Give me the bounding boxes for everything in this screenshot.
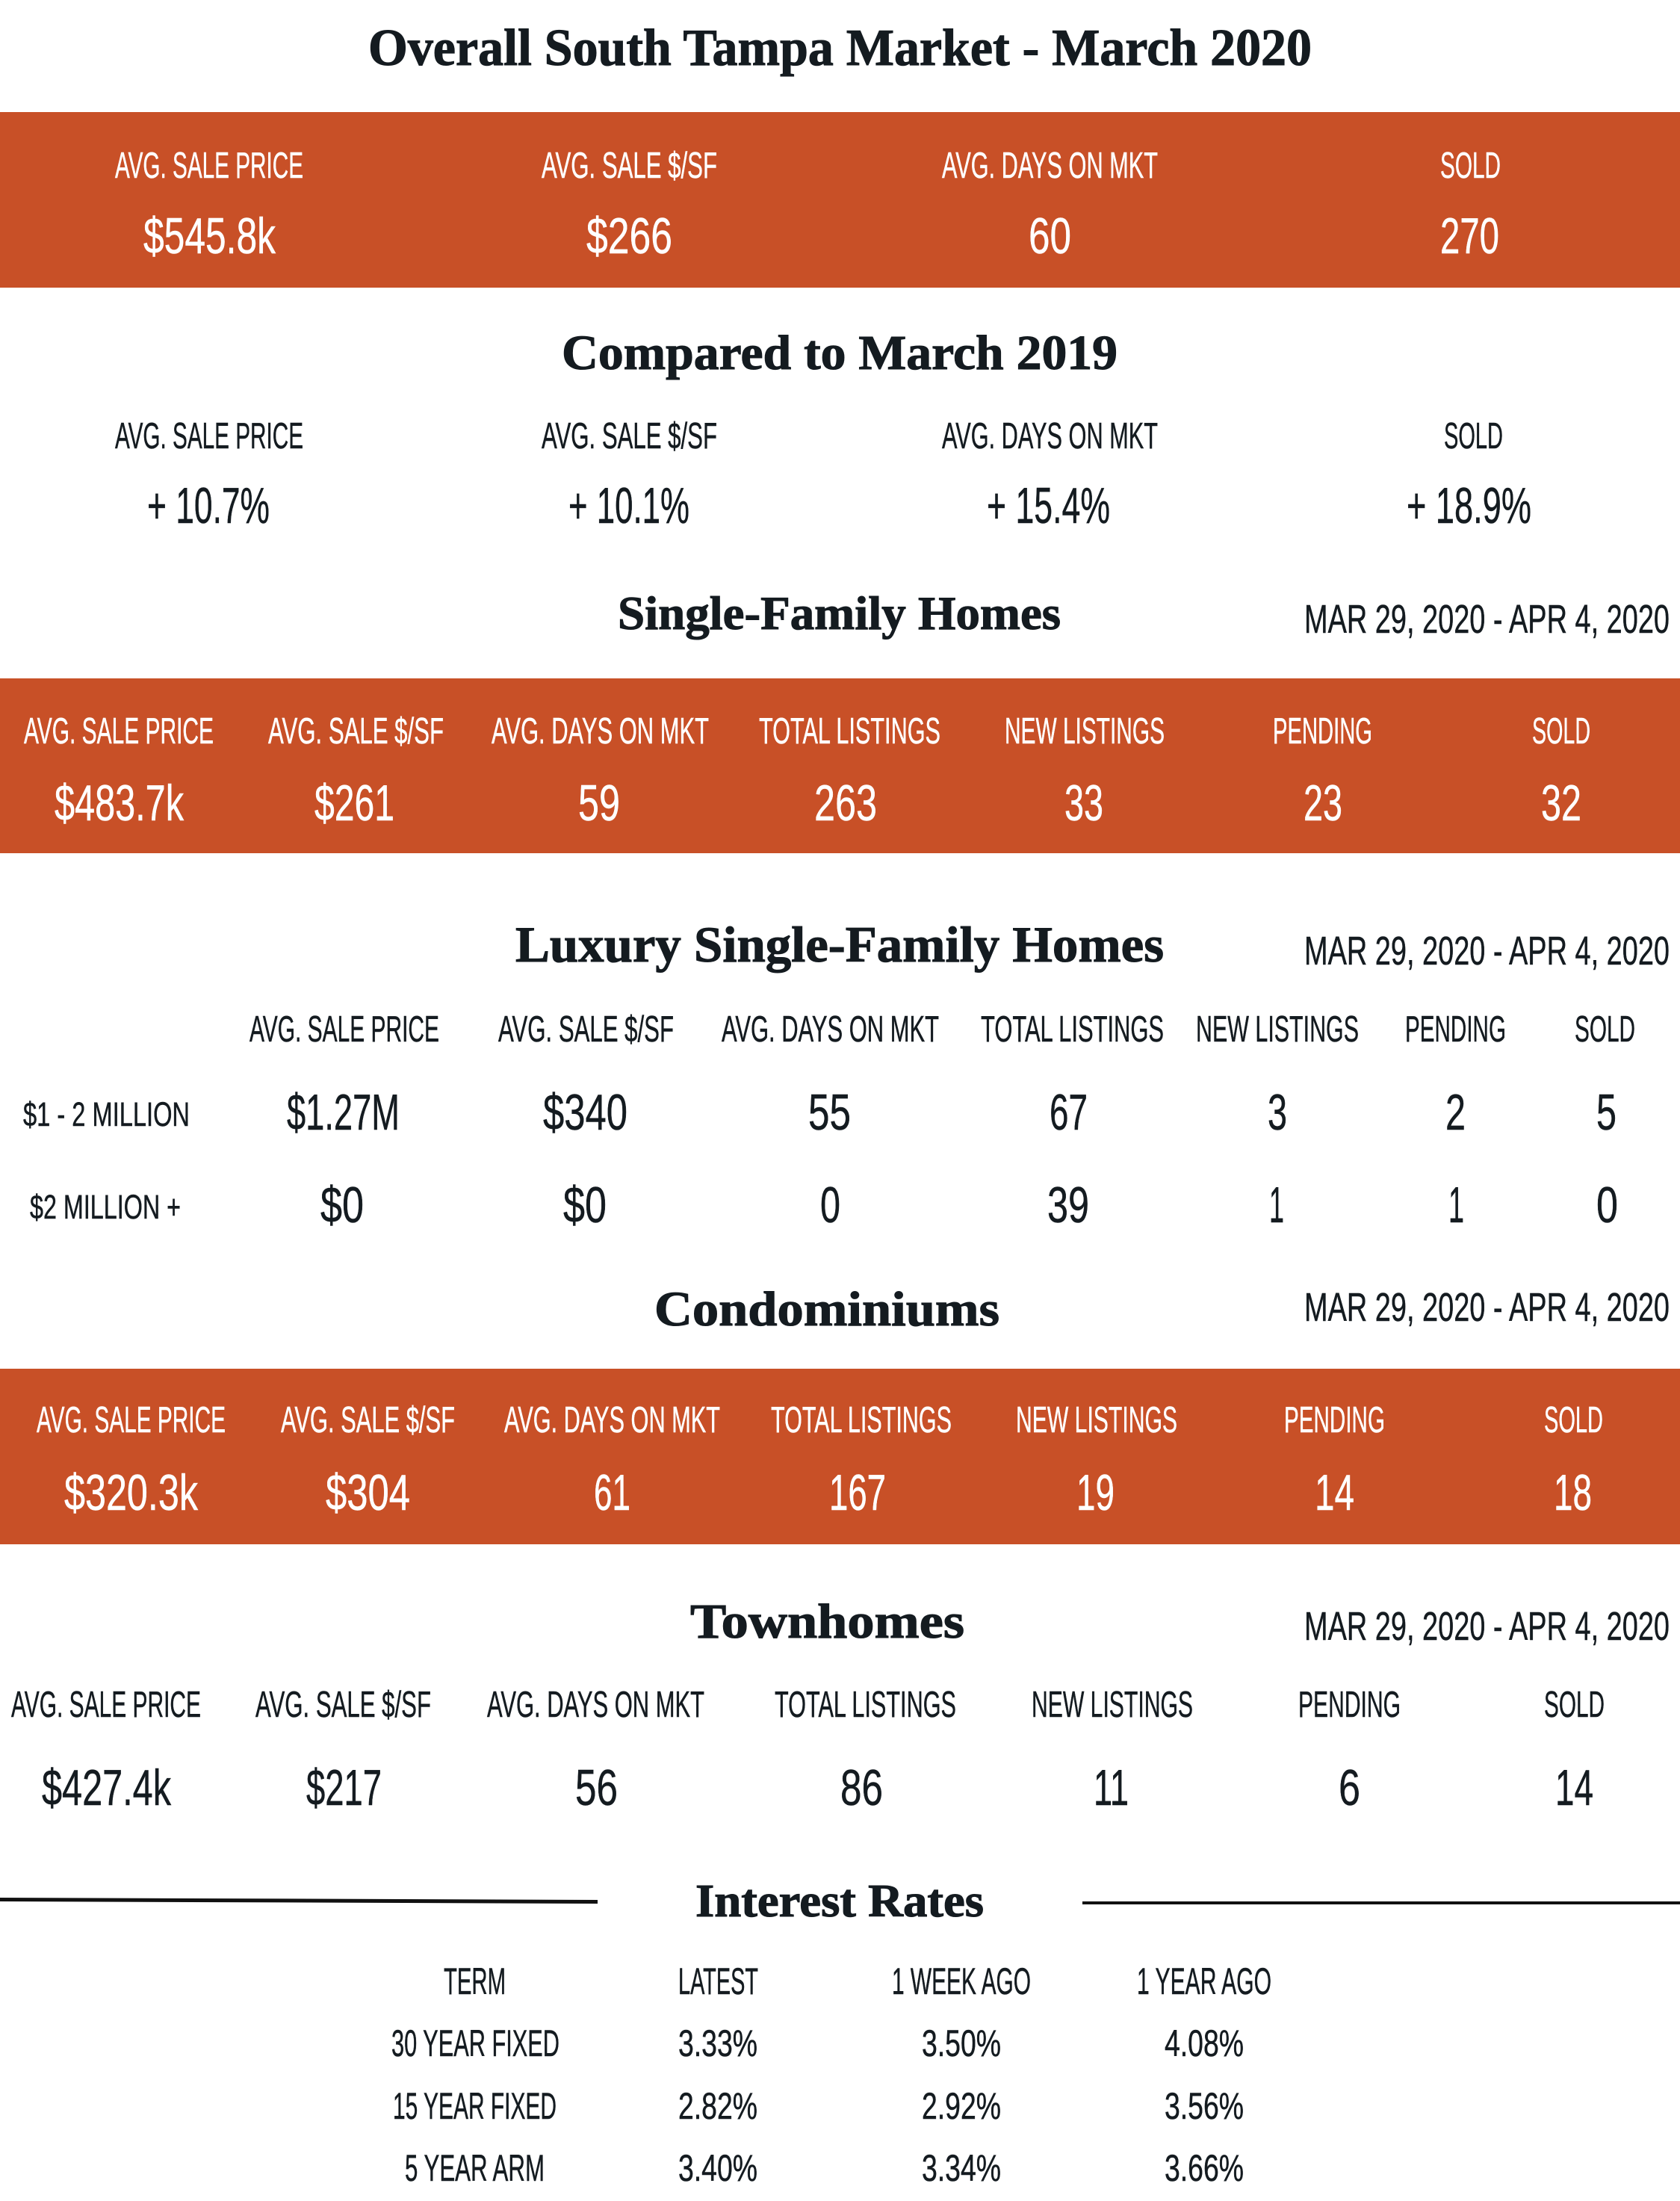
panel: townhomes metrics	[11, 1685, 1605, 1816]
panel: year over year comparison	[115, 416, 1531, 534]
metric: avg days on market	[942, 146, 1158, 264]
metric: pending	[1284, 1400, 1385, 1521]
row: $2 million +: 0	[1596, 1177, 1618, 1233]
metric: avg days on market: AVG. DAYS ON MKT	[487, 1685, 704, 1725]
metric: avg sale price: AVG. SALE PRICE	[37, 1400, 226, 1440]
row: $2 million +: $0	[320, 1177, 364, 1233]
metric: new listings	[1005, 711, 1165, 832]
metric: avg days on market change: + 15.4%	[987, 477, 1110, 534]
metric: sold change: + 18.9%	[1407, 477, 1531, 534]
row: 30 year fixed	[391, 2022, 1244, 2064]
metric: avg days on market: 56	[575, 1759, 618, 1816]
metric: avg sale price: AVG. SALE PRICE	[24, 711, 214, 752]
metric: pending: PENDING	[1298, 1685, 1401, 1725]
metric: new listings: NEW LISTINGS	[1016, 1400, 1177, 1440]
row: 5 year arm	[405, 2147, 1244, 2189]
metric: new listings: 19	[1076, 1464, 1115, 1521]
row: 5 year arm: 3.34%	[922, 2147, 1001, 2189]
metric: new listings	[1032, 1685, 1193, 1816]
row: 30 year fixed: 4.08%	[1165, 2022, 1244, 2064]
metric: avg sale $/sf: $217	[306, 1759, 382, 1816]
row: 30 year fixed: 3.50%	[922, 2022, 1001, 2064]
row: 5 year arm: 3.66%	[1165, 2147, 1244, 2189]
metric: avg days on market: 61	[594, 1464, 630, 1521]
heading: compared to march 2019: Compared to March 2019	[562, 326, 1118, 380]
metric: avg sale price: $320.3k	[64, 1464, 199, 1521]
metric: pending: 6	[1339, 1759, 1360, 1816]
row: $2 million +: 39	[1047, 1177, 1089, 1233]
metric: sold	[1440, 146, 1501, 264]
metric: pending: 23	[1304, 775, 1342, 832]
metric: new listings: NEW LISTINGS	[1032, 1685, 1193, 1725]
metric: total listings	[775, 1685, 956, 1816]
metric: avg days on market: AVG. DAYS ON MKT	[492, 711, 709, 752]
metric: avg days on market: 59	[578, 775, 620, 832]
metric: avg sale $/sf: AVG. SALE $/SF	[542, 146, 717, 186]
row: 5 year arm: 5 YEAR ARM	[405, 2147, 545, 2189]
metric: pending: PENDING	[1273, 711, 1372, 752]
row: 15 year fixed	[393, 2085, 1244, 2127]
row: $2 million +: $2 MILLION +	[30, 1188, 181, 1226]
metric: new listings: NEW LISTINGS	[1005, 711, 1165, 752]
heading: condominiums: Condominiums	[654, 1282, 999, 1337]
metric: total listings: TOTAL LISTINGS	[771, 1400, 952, 1440]
metric: total listings: 263	[814, 775, 877, 832]
metric: avg sale $/sf change: + 10.1%	[568, 477, 689, 534]
metric: avg days on market	[504, 1400, 720, 1521]
metric: sold: SOLD	[1544, 1685, 1605, 1725]
row: 30 year fixed: 3.33%	[678, 2022, 757, 2064]
metric: new listings: 33	[1064, 775, 1103, 832]
metric: sold: 270	[1440, 208, 1499, 264]
metric: avg sale $/sf: $261	[314, 775, 394, 832]
metric: avg sale price	[11, 1685, 201, 1816]
metric: avg days on market	[487, 1685, 704, 1816]
row: $2 million +: 1	[1448, 1177, 1464, 1233]
metric: total listings: TOTAL LISTINGS	[759, 711, 940, 752]
metric: sold: SOLD	[1532, 711, 1590, 752]
column headers: AVG. DAYS ON MKT	[722, 1009, 939, 1050]
row: $2 million +: 0	[820, 1177, 840, 1233]
metric: sold: SOLD	[1544, 1400, 1603, 1440]
metric: pending: 14	[1315, 1464, 1354, 1521]
metric: avg sale $/sf	[281, 1400, 455, 1521]
metric: sold	[1544, 1400, 1603, 1521]
row: $1 - 2 million: $1.27M	[287, 1084, 400, 1141]
panel: luxury table	[23, 1009, 1635, 1233]
panel: overall market band	[0, 112, 1680, 288]
metric: avg sale $/sf change	[542, 416, 717, 534]
metric: sold	[1532, 711, 1590, 832]
row: 15 year fixed: 2.92%	[922, 2085, 1001, 2127]
metric: avg sale $/sf: AVG. SALE $/SF	[268, 711, 444, 752]
metric: sold: 14	[1555, 1759, 1593, 1816]
metric: sold	[1544, 1685, 1605, 1816]
metric: avg sale price: AVG. SALE PRICE	[11, 1685, 201, 1725]
row: $1 - 2 million: 3	[1268, 1084, 1287, 1141]
table header: LATEST	[678, 1960, 758, 2002]
column headers: NEW LISTINGS	[1196, 1009, 1359, 1050]
metric: avg days on market change: AVG. DAYS ON MKT	[942, 416, 1158, 456]
row: $2 million +: $0	[563, 1177, 607, 1233]
column headers	[249, 1009, 1635, 1050]
heading: interest rates with rules: Interest Rates	[695, 1876, 984, 1927]
row: $1 - 2 million: $1 - 2 MILLION	[23, 1095, 190, 1133]
column headers: PENDING	[1405, 1009, 1506, 1050]
panel: interest rates table	[391, 1960, 1271, 2189]
column headers: AVG. SALE PRICE	[249, 1009, 439, 1050]
heading: townhomes: Townhomes	[690, 1594, 964, 1649]
metric: avg sale price change: AVG. SALE PRICE	[115, 416, 303, 456]
metric: sold: SOLD	[1440, 146, 1501, 186]
row: $2 million +: 1	[1269, 1177, 1284, 1233]
title: Overall South Tampa Market - March 2020	[368, 19, 1312, 77]
metric: avg sale price: $427.4k	[42, 1759, 172, 1816]
table header	[444, 1960, 1271, 2002]
metric: total listings: 167	[829, 1464, 886, 1521]
metric: avg sale $/sf: $304	[326, 1464, 410, 1521]
metric: avg sale price: $483.7k	[55, 775, 185, 832]
metric: total listings: TOTAL LISTINGS	[775, 1685, 956, 1725]
metric: pending	[1273, 711, 1372, 832]
row: 15 year fixed: 15 YEAR FIXED	[393, 2085, 557, 2127]
metric: sold change: SOLD	[1444, 416, 1503, 456]
row: $1 - 2 million: 55	[808, 1084, 851, 1141]
metric: avg sale $/sf	[268, 711, 444, 832]
metric: total listings	[759, 711, 940, 832]
metric: avg sale price	[115, 146, 303, 264]
metric: sold change	[1407, 416, 1531, 534]
table header: TERM	[444, 1960, 506, 2002]
heading: interest rates with rules	[0, 1876, 1680, 1927]
metric: sold: 18	[1554, 1464, 1592, 1521]
row: $2 million +	[30, 1177, 1618, 1233]
heading: luxury single-family homes: Luxury Single-Family Homes	[515, 916, 1164, 973]
metric: avg days on market change	[942, 416, 1158, 534]
metric: total listings	[771, 1400, 952, 1521]
metric: avg sale price change	[115, 416, 303, 534]
metric: avg sale $/sf	[542, 146, 717, 264]
metric: sold: 32	[1541, 775, 1581, 832]
metric: avg sale price	[37, 1400, 226, 1521]
metric: total listings: 86	[840, 1759, 883, 1816]
row: 5 year arm: 3.40%	[678, 2147, 757, 2189]
metric: avg days on market: AVG. DAYS ON MKT	[504, 1400, 720, 1440]
metric: avg sale price	[24, 711, 214, 832]
metric: pending: PENDING	[1284, 1400, 1385, 1440]
metric: new listings	[1016, 1400, 1177, 1521]
row: $1 - 2 million: 67	[1050, 1084, 1088, 1141]
metric: pending	[1298, 1685, 1401, 1816]
table header: 1 YEAR AGO	[1137, 1960, 1271, 2002]
metric: avg sale $/sf: AVG. SALE $/SF	[281, 1400, 455, 1440]
metric: avg sale $/sf	[255, 1685, 431, 1816]
column headers: TOTAL LISTINGS	[981, 1009, 1164, 1050]
row: 15 year fixed: 2.82%	[678, 2085, 757, 2127]
metric: avg sale $/sf: AVG. SALE $/SF	[255, 1685, 431, 1725]
column headers: AVG. SALE $/SF	[498, 1009, 674, 1050]
row: $1 - 2 million: $340	[543, 1084, 627, 1141]
metric: avg days on market: AVG. DAYS ON MKT	[942, 146, 1158, 186]
metric: avg sale $/sf: $266	[586, 208, 672, 264]
row: 30 year fixed: 30 YEAR FIXED	[391, 2022, 560, 2064]
row: $1 - 2 million	[23, 1084, 1617, 1141]
metric: avg sale price: AVG. SALE PRICE	[115, 146, 303, 186]
table header: 1 WEEK AGO	[892, 1960, 1031, 2002]
metric: avg sale $/sf change: AVG. SALE $/SF	[542, 416, 717, 456]
column headers: SOLD	[1575, 1009, 1635, 1050]
metric: avg sale price: $545.8k	[143, 208, 276, 264]
metric: avg days on market	[492, 711, 709, 832]
heading: single-family homes: Single-Family Homes	[618, 586, 1061, 640]
row: $1 - 2 million: 5	[1596, 1084, 1617, 1141]
panel: single-family band	[0, 678, 1680, 853]
row: 15 year fixed: 3.56%	[1165, 2085, 1244, 2127]
metric: new listings: 11	[1094, 1759, 1129, 1816]
metric: avg days on market: 60	[1029, 208, 1071, 264]
metric: avg sale price change: + 10.7%	[147, 477, 270, 534]
row: $1 - 2 million: 2	[1445, 1084, 1466, 1141]
panel: condominiums band	[0, 1369, 1680, 1544]
